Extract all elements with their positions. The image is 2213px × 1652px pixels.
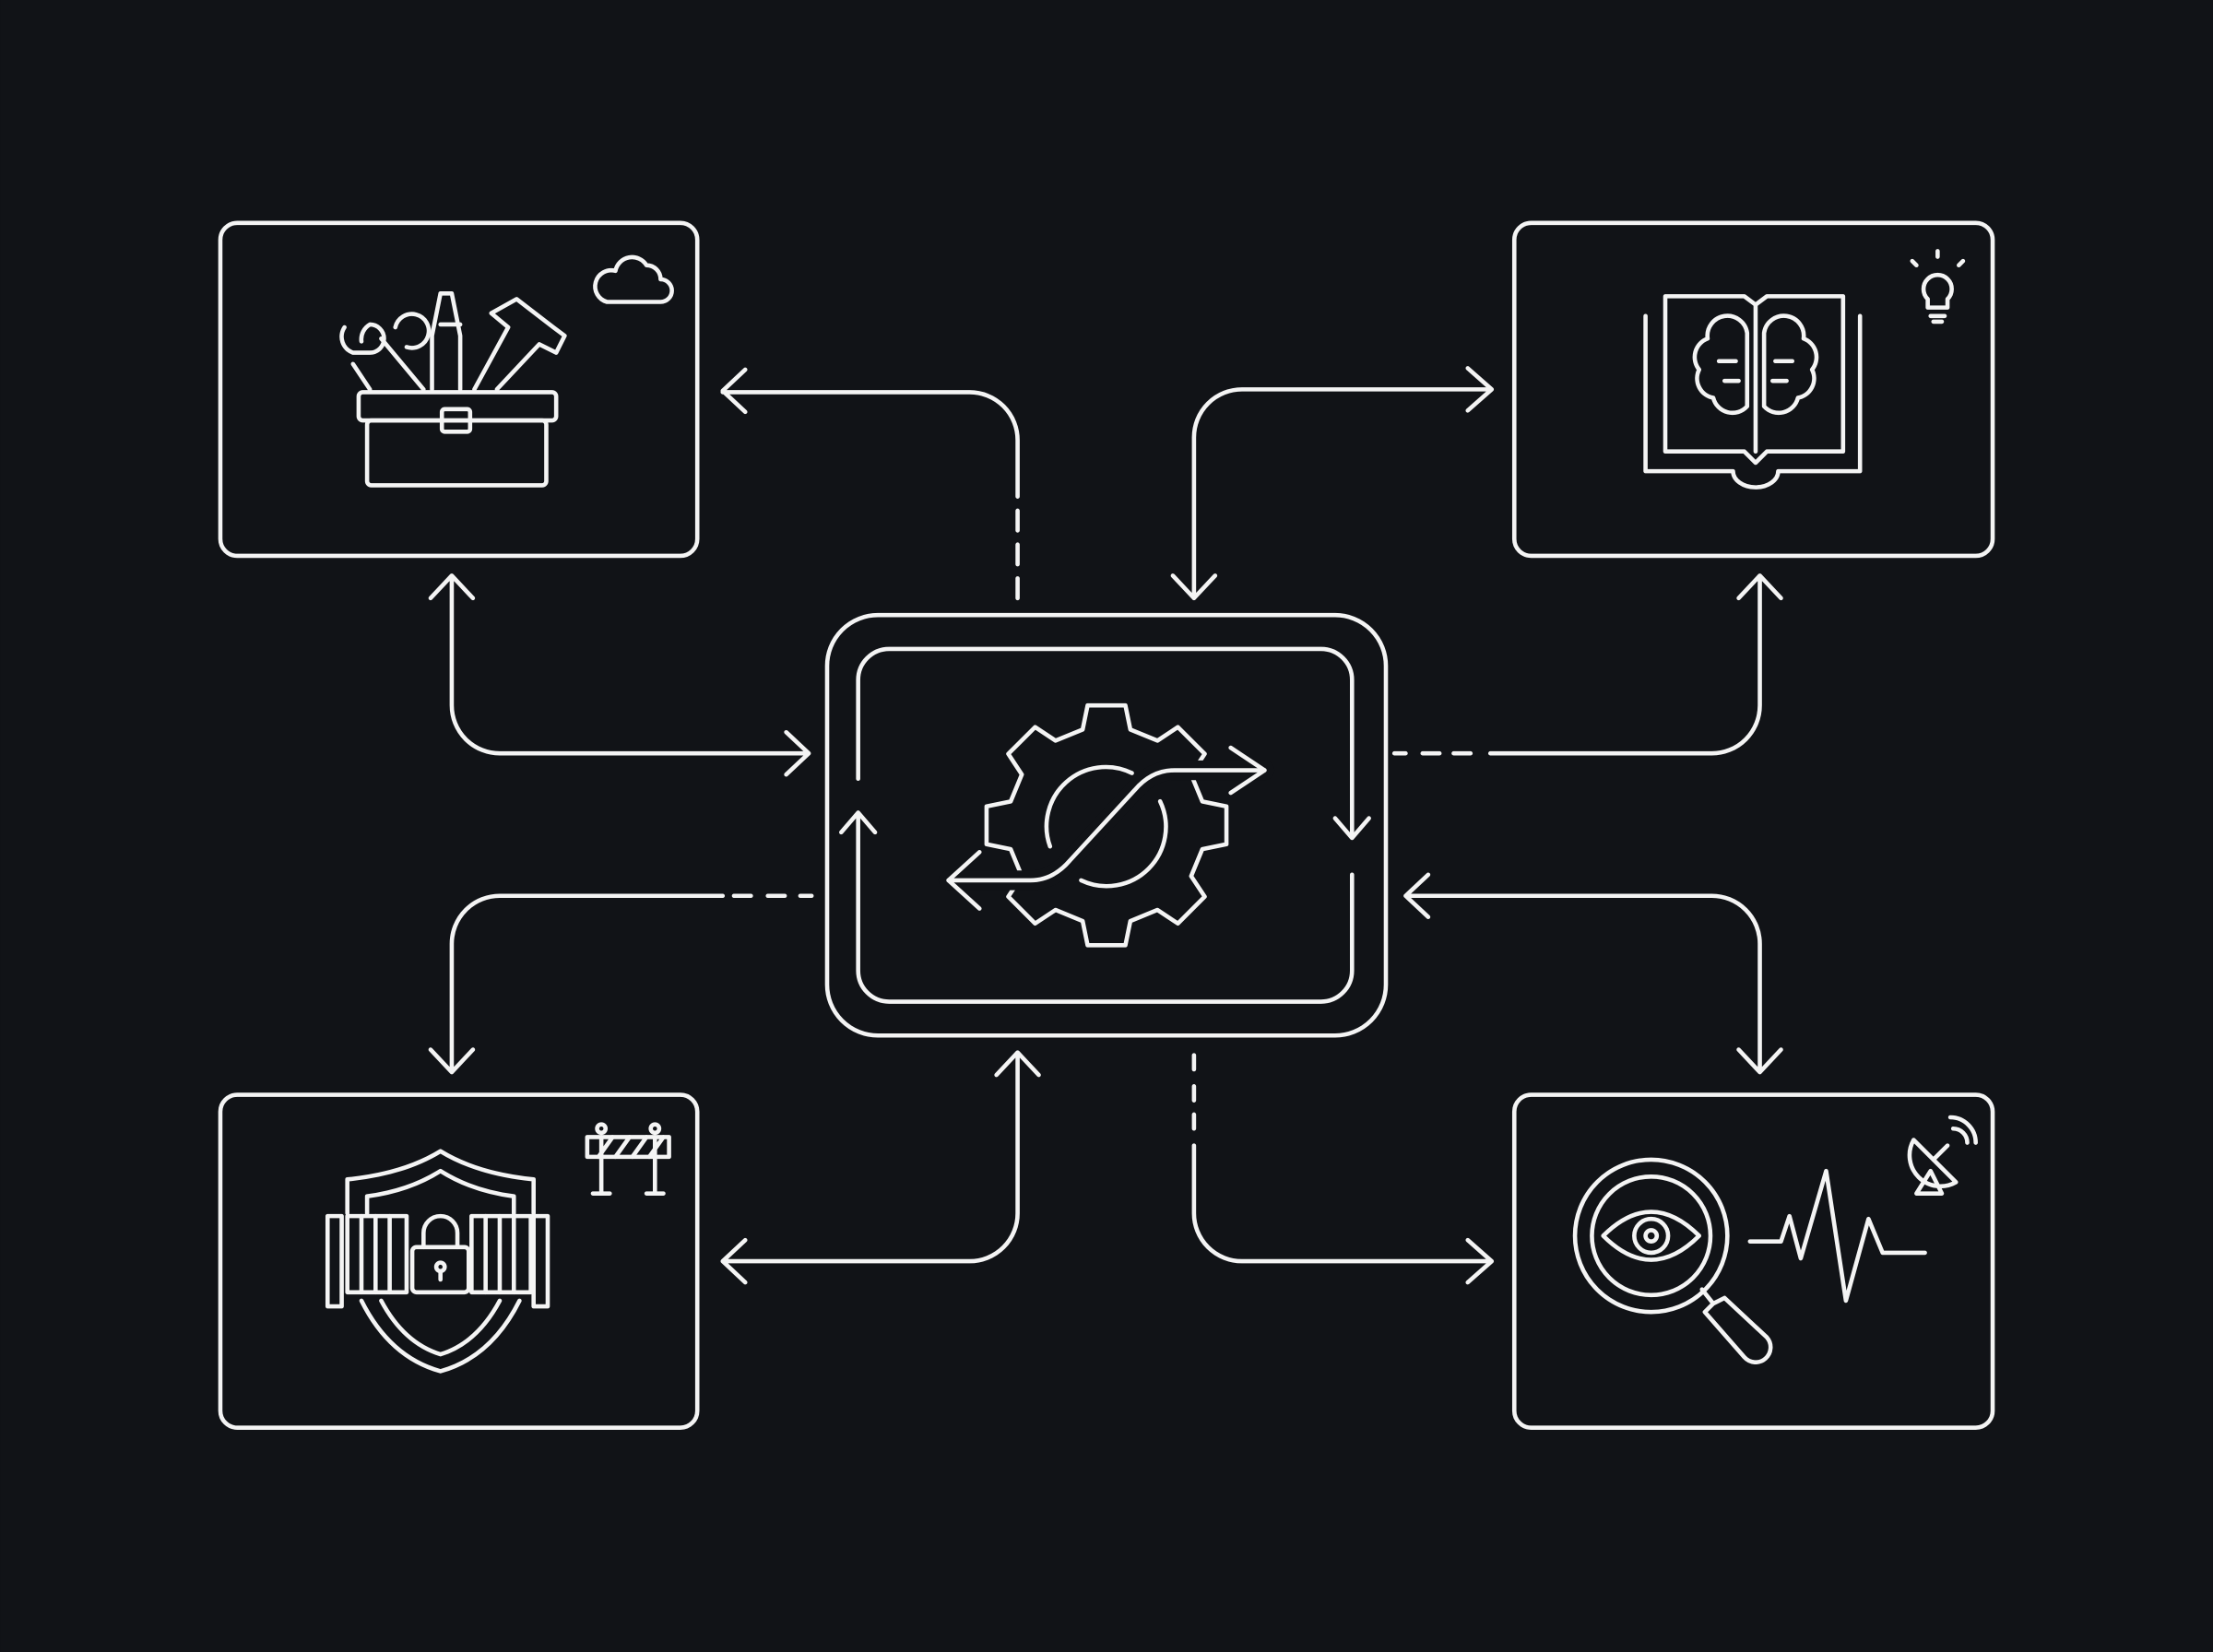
arrow: security to center <box>723 1053 1039 1282</box>
arrow: center to knowledge <box>1173 368 1492 598</box>
icon: book with brain <box>1646 296 1860 488</box>
panel: knowledge box <box>1514 223 1993 556</box>
icon: pulse line <box>1750 1171 1925 1301</box>
panel: security box <box>220 1095 697 1428</box>
panel: monitoring box <box>1514 1095 1993 1428</box>
icon: cloud <box>595 257 672 301</box>
panel: central process <box>827 615 1386 1035</box>
inner cycle loop with arrows <box>858 649 1352 835</box>
arrow: knowledge to center <box>1394 575 1781 753</box>
icon: magnifier with eye <box>1575 1160 1770 1363</box>
icon: toolbox <box>342 293 564 485</box>
arrow: center to tools (top) <box>723 370 1018 598</box>
icon: shield with lock and gates <box>327 1151 548 1371</box>
panel: tools box <box>220 223 697 556</box>
arrow: tools to center (bottom) <box>431 575 809 774</box>
arrow: center to monitoring <box>1194 1056 1492 1282</box>
arrow: monitoring to center <box>1405 875 1781 1072</box>
icon: light bulb <box>1912 251 1963 322</box>
arrow: center to security <box>431 896 811 1072</box>
icon: barrier <box>587 1125 669 1194</box>
icon: satellite dish <box>1910 1117 1976 1194</box>
icon: gear with exchange arrows <box>949 705 1264 945</box>
